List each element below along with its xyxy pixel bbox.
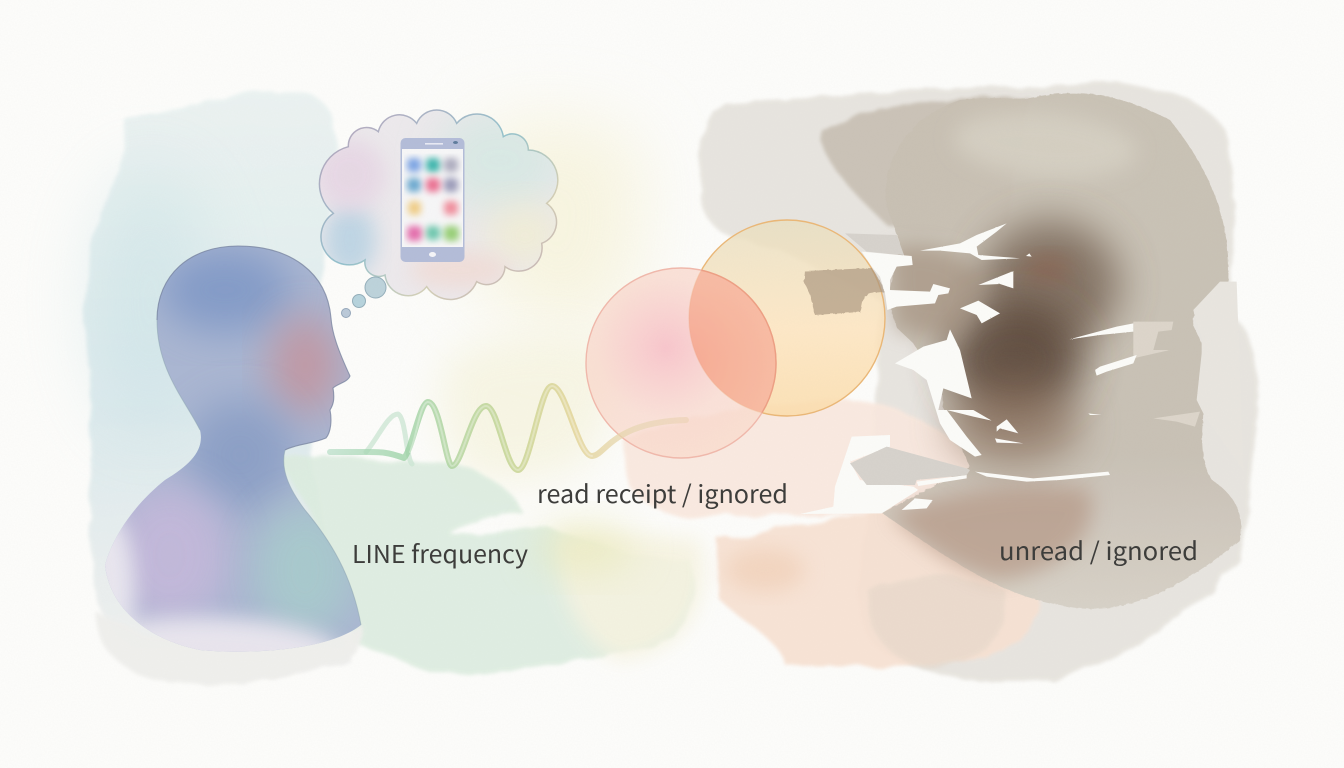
grey patches <box>845 233 970 485</box>
cloud fill <box>319 110 558 299</box>
wash: reddish spot <box>1024 254 1072 282</box>
patch inside orange circle <box>804 268 884 315</box>
right pale gap <box>1193 282 1243 470</box>
wash: pale under figure <box>95 610 362 685</box>
icon: overlapping circles <box>586 220 885 458</box>
watercolor infographic <box>70 80 1260 686</box>
circle overlap <box>689 270 777 413</box>
white band beside lower grey <box>917 475 967 486</box>
wash: cream bottom <box>558 530 703 660</box>
wash: yellow green dab <box>535 522 635 574</box>
label: LINE frequency: LINE frequency <box>352 536 528 571</box>
wash: teal glow <box>90 170 210 430</box>
label: read receipt: read receipt / ignored <box>537 476 788 511</box>
circle: orange <box>689 220 885 416</box>
wash: dark brown core <box>947 302 1083 418</box>
wash: pale yellow <box>470 119 642 332</box>
thought bubbles <box>365 277 386 298</box>
circle: pink <box>586 268 776 458</box>
shoulder outline <box>157 320 361 625</box>
wash: cream over green <box>440 337 630 482</box>
pale cracks <box>1133 322 1200 427</box>
wash: brown shadow upper <box>980 220 1120 350</box>
wash: orange dab <box>725 548 805 592</box>
wash: warm bottom band <box>890 486 1092 580</box>
wash: pale teal <box>85 91 350 680</box>
wash: top light patch <box>951 105 1139 185</box>
wash: pale grey outer <box>699 83 1260 682</box>
panel: left washes <box>85 91 703 685</box>
wash: peach lower <box>718 512 1040 666</box>
wash: taupe upper left layer <box>822 97 1030 240</box>
label: unread: unread / ignored <box>999 533 1198 568</box>
wash: lower taupe overlap <box>868 575 1006 670</box>
cloud outline <box>319 110 558 299</box>
head outline <box>157 246 350 450</box>
app icons <box>407 158 459 241</box>
figure: head silhouette <box>105 246 362 652</box>
wave line <box>330 386 686 470</box>
wash: brown fragments <box>890 246 985 340</box>
icon: phone <box>400 138 464 262</box>
cloud washes <box>315 110 565 288</box>
panel: right washes <box>625 83 1260 682</box>
chart: frequency wave <box>330 386 686 470</box>
icon: thought cloud <box>315 110 565 317</box>
head wash <box>105 246 361 652</box>
wave shadow <box>366 414 412 464</box>
wash: warm brown low <box>949 383 1081 467</box>
cracks drawn in zoom coordinates <box>800 223 1243 514</box>
wash: peach centre <box>625 399 975 518</box>
wash: green <box>275 456 693 674</box>
wave highlight <box>410 386 592 470</box>
white cracks <box>800 223 1137 514</box>
wash: taupe body <box>882 93 1241 609</box>
